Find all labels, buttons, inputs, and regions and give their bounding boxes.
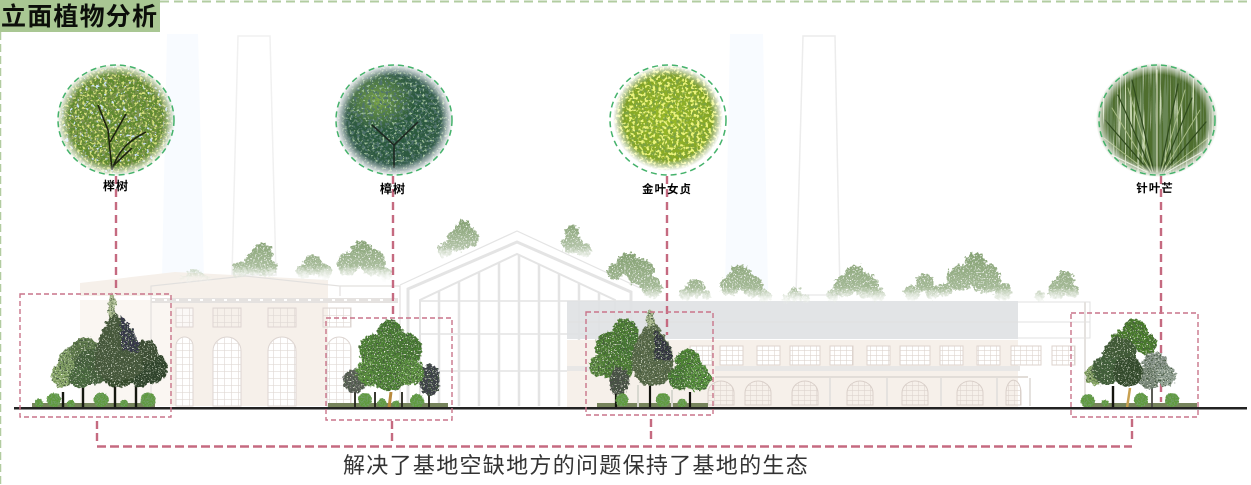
label: 榉树: 榉树: [103, 178, 129, 193]
label: 金叶女贞: 金叶女贞: [642, 182, 692, 196]
connector lines: [116, 176, 1161, 402]
plant cluster: 针叶芒 group: [1081, 319, 1197, 408]
chimney: outline right: [796, 36, 840, 295]
plant photo: 樟树: [332, 62, 456, 178]
left hall: [80, 272, 400, 406]
plant photo: 榉树: [54, 62, 178, 178]
conclusion caption: 解决了基地空缺地方的问题保持了基地的生态: [343, 453, 809, 478]
label: 樟树: 樟树: [380, 181, 406, 196]
plant photo: 针叶芒: [1096, 62, 1218, 178]
plant cluster: 榉树 group: [32, 294, 168, 408]
chimney: pale blue right: [725, 34, 768, 290]
chimney: pale blue: [162, 34, 204, 278]
glass house: [400, 231, 640, 406]
plant cluster: 樟树 group: [328, 320, 448, 408]
building elevation backdrop: [80, 34, 1090, 407]
dashed highlight boxes: [20, 294, 1198, 420]
title tab: 立面植物分析: [1, 2, 158, 31]
plant photo: 金叶女贞: [610, 62, 726, 176]
right wing: [567, 301, 1090, 407]
bracket connecting the four planting areas: [97, 419, 1132, 446]
faded roof trees: [179, 220, 1079, 303]
plant cluster: 金叶女贞 group: [589, 309, 711, 408]
label: 针叶芒: 针叶芒: [1136, 181, 1174, 195]
chimney: outline: [232, 36, 276, 275]
ground line: [14, 407, 1247, 410]
